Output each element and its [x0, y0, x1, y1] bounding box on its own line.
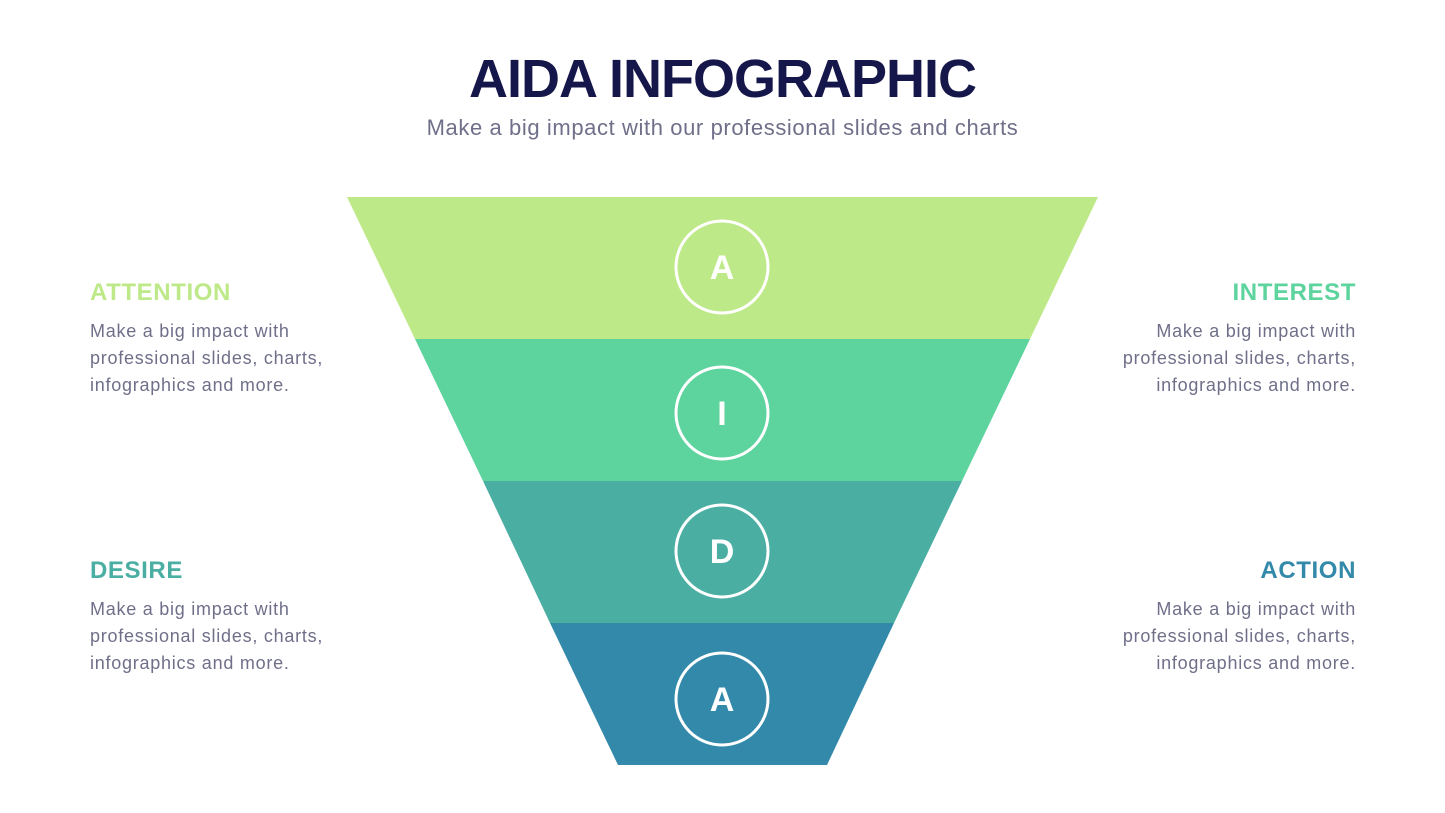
text: desire: infographics and more. — [90, 653, 290, 673]
text: desire: DESIRE — [90, 557, 183, 584]
text: desire: professional slides, charts, — [90, 626, 323, 646]
text: attention: Make a big impact with — [90, 321, 290, 341]
text: interest: professional slides, charts, — [1123, 348, 1356, 368]
text: attention: professional slides, charts, — [90, 348, 323, 368]
text: desire: Make a big impact with — [90, 599, 290, 619]
text: action: professional slides, charts, — [1123, 626, 1356, 646]
band: interest: I — [717, 395, 727, 433]
text: action: infographics and more. — [1156, 653, 1356, 673]
band: interest — [415, 339, 1030, 481]
text: action: ACTION — [1260, 557, 1356, 584]
text: interest: INTEREST — [1233, 279, 1356, 306]
text: action: Make a big impact with — [1156, 599, 1356, 619]
title: AIDA INFOGRAPHIC — [469, 49, 976, 109]
text: attention: ATTENTION — [90, 279, 231, 306]
band: attention: A — [710, 249, 734, 287]
text: attention — [90, 279, 323, 395]
band: action — [550, 623, 894, 765]
text: interest: Make a big impact with — [1156, 321, 1356, 341]
text: action — [1123, 557, 1356, 673]
text: interest: infographics and more. — [1156, 375, 1356, 395]
subtitle: Make a big impact with our professional slides and charts — [427, 115, 1018, 140]
text: attention: infographics and more. — [90, 375, 290, 395]
band: desire — [483, 481, 962, 623]
band: attention — [347, 197, 1098, 339]
text: interest — [1123, 279, 1356, 395]
band: desire: D — [710, 533, 734, 571]
band: action: A — [710, 681, 734, 719]
text: desire — [90, 557, 323, 673]
